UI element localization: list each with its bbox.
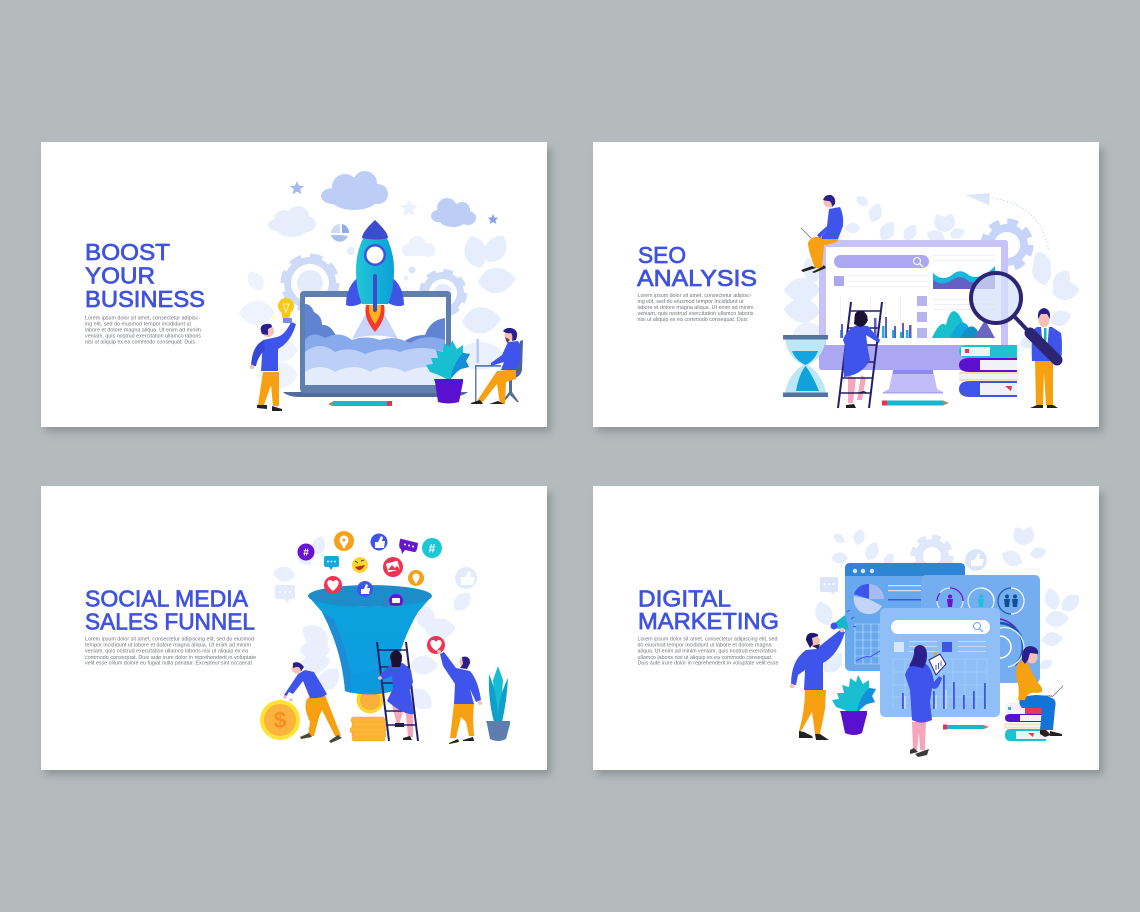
person with lightbulb — [250, 298, 296, 411]
text block: funnel description: tempor incididunt ut labore et dolore magna aliqua. Ut enim ad minim — [85, 642, 251, 648]
person sitting on books with laptop — [1016, 646, 1063, 737]
text block: marketing description: ullamco laboris nisi ut aliquip ex ea commodo consequat. — [638, 655, 773, 661]
books — [1005, 703, 1046, 741]
mountain chart — [932, 311, 995, 338]
heading: seo analysis: SEO — [638, 242, 686, 268]
background leaves — [272, 534, 475, 715]
ladder and woman — [377, 642, 418, 741]
monitor with charts — [819, 240, 1008, 394]
text block: boost description: veniam, quis nostrud exercitation ullamco laboris — [85, 334, 201, 340]
dashboard window: audience — [921, 575, 1040, 683]
coin with dollar sign — [260, 700, 300, 740]
plant: potted leaves — [832, 675, 876, 735]
person holding heart — [427, 636, 482, 744]
background leaves and icons — [811, 524, 1084, 677]
woman with tablet — [905, 645, 946, 757]
dashboard window: analytics — [845, 563, 965, 671]
person sitting on monitor — [801, 195, 843, 273]
icon: pie chart — [331, 224, 416, 280]
person with megaphone — [790, 610, 856, 740]
icon: gears — [284, 257, 464, 314]
person pushing coin — [283, 662, 342, 743]
heading: boost your business: BOOST — [85, 239, 170, 265]
icon: pencil — [943, 724, 989, 730]
text block: funnel description: Lorem ipsum dolor sit amet, consectetur adipiscing elit, sed do eiusmod — [85, 636, 254, 642]
heading: seo analysis — [637, 242, 757, 291]
social media icons — [298, 531, 442, 606]
heading: boost your business: BUSINESS — [85, 286, 205, 312]
icon: pencil — [328, 401, 392, 406]
plant in blue pot — [486, 666, 510, 741]
text block: marketing description — [638, 636, 778, 666]
heading: social media sales funnel: SALES FUNNEL — [85, 608, 255, 634]
text block: funnel description — [85, 636, 256, 666]
icon: gear — [986, 224, 1028, 266]
laptop illustration — [283, 291, 468, 397]
text block: marketing description: aliqua. Ut enim ad minim veniam, quis nostrud exercitation — [638, 648, 776, 654]
text block: boost description: nisi ut aliquip ex ea commodo consequat. Duis — [85, 340, 195, 346]
text block: boost description — [85, 315, 201, 346]
clouds and stars — [268, 171, 498, 257]
search bar — [834, 255, 929, 268]
plant: potted leaves — [426, 340, 470, 404]
text block: marketing description: Lorem ipsum dolor sit amet, consectetur adipiscing elit, sed — [638, 636, 778, 642]
heading: social media sales funnel: SOCIAL MEDIA — [85, 586, 248, 612]
text block: boost description: labore et dolore magna aliqua. Ut enim ad minim — [85, 327, 201, 333]
heading: digital marketing — [638, 586, 779, 634]
text block: funnel description: commodo consequat. Duis aute irure dolor in reprehenderit in voluptate — [85, 655, 256, 661]
text block: funnel description: veniam, quis nostrud exercitation ullamco laboris nisi ut aliquip ex ea — [85, 648, 249, 654]
bar chart — [902, 675, 986, 709]
icon: pencil — [882, 400, 949, 406]
heading: seo analysis: ANALYSIS — [637, 265, 757, 291]
panel: social media sales funnel — [41, 486, 551, 775]
icon: paper plane and dotted path — [965, 193, 1049, 250]
hourglass — [783, 335, 828, 397]
background leaves — [239, 230, 517, 388]
area chart — [933, 266, 995, 289]
panel: seo analysis — [593, 142, 1103, 432]
heading: social media sales funnel — [85, 586, 255, 634]
text block: seo description: labore et dolore magna aliqua. Ut enim ad minim — [638, 305, 754, 311]
coin stack — [350, 717, 386, 741]
text block: seo description — [638, 293, 754, 323]
heading: boost your business: YOUR — [85, 262, 155, 288]
text block: funnel description: velit esse cillum dolore eu fugiat nulla pariatur. Excepteur sint occaecat — [85, 660, 252, 666]
bar chart — [840, 317, 912, 338]
text block: seo description: nisi ut aliquip ex ea commodo consequat. Duis — [638, 317, 748, 323]
text block: seo description: veniam, quis nostrud exercitation ullamco laboris — [638, 311, 754, 317]
panel: boost your business — [41, 142, 551, 432]
text block: marketing description: Duis aute irure dolor in reprehenderit in voluptate velit esse — [638, 660, 778, 666]
social media icons: # — [429, 542, 436, 556]
dashboard window: search and chart — [880, 608, 1000, 717]
person with magnifier — [1030, 308, 1062, 408]
magnifying glass — [971, 273, 1057, 360]
funnel — [308, 585, 432, 694]
background leaves — [783, 193, 1081, 353]
coin under funnel — [356, 686, 384, 714]
ladder and woman — [838, 302, 882, 408]
coin with dollar sign: $ — [274, 707, 287, 733]
person at desk — [471, 328, 523, 404]
text block: boost description: ing elit, sed do eiusmod tempor incididunt ut — [85, 321, 191, 327]
heading: digital marketing: MARKETING — [638, 608, 779, 634]
text block: seo description: Lorem ipsum dolor sit amet, consectetur adipisc- — [638, 293, 752, 299]
heading: boost your business — [85, 239, 205, 312]
text block: marketing description: do eiusmod tempor incididunt ut labore et dolore magna — [638, 642, 772, 648]
text block: seo description: ing elit, sed do eiusmod tempor incididunt ut — [638, 299, 744, 305]
text block: boost description: Lorem ipsum dolor sit amet, consectetur adipisc- — [85, 315, 200, 321]
books — [959, 345, 1018, 397]
search bar — [891, 620, 990, 634]
icon: rocket — [346, 220, 404, 332]
social media icons: # — [303, 548, 309, 558]
heading: digital marketing: DIGITAL — [638, 586, 731, 612]
panel: digital marketing — [593, 486, 1103, 775]
pale social icons — [275, 567, 477, 604]
